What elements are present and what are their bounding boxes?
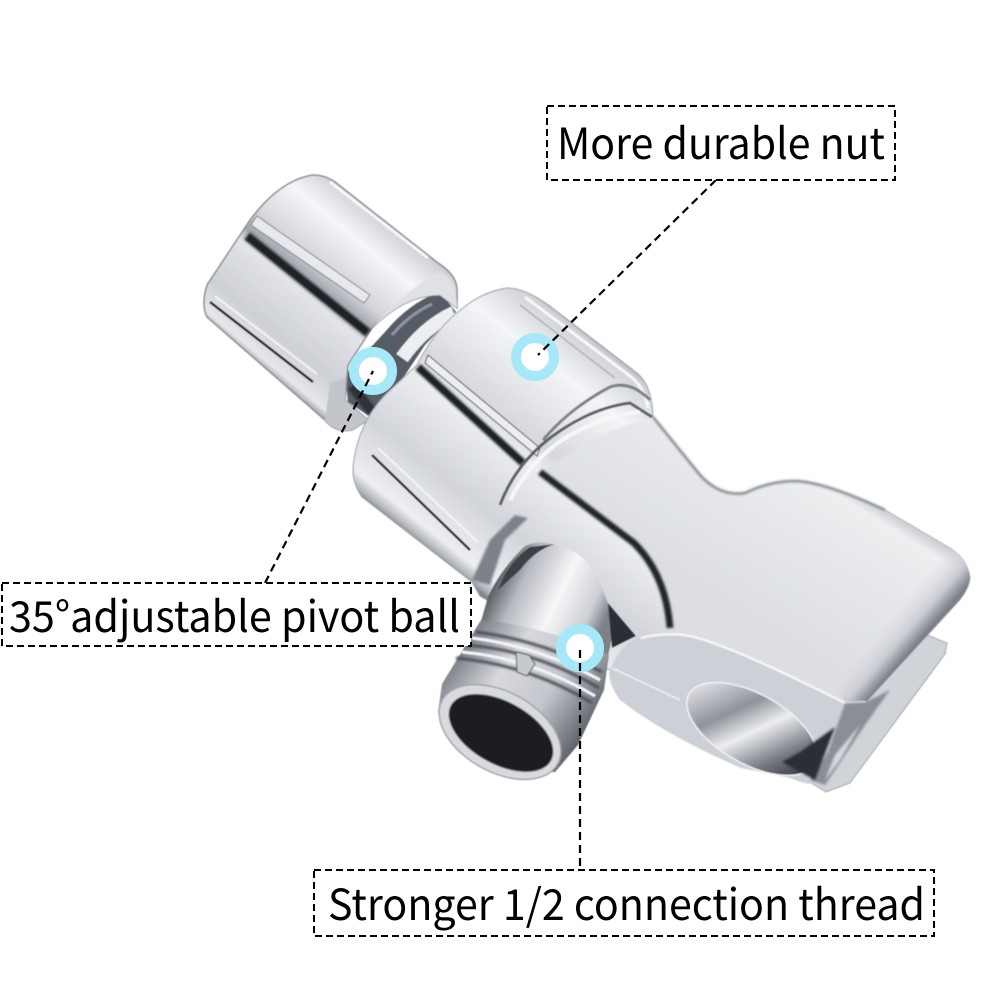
outlet opening: [436, 678, 566, 788]
label box: More durable nut: [557, 110, 885, 172]
main body: [353, 288, 970, 703]
threaded connector: [423, 620, 609, 799]
callout: connection thread: [314, 629, 934, 936]
threaded neck between nut and body: [345, 292, 456, 418]
nut lower groove: [210, 302, 313, 382]
outlet stub: [480, 542, 636, 655]
clamp jaw: [609, 634, 890, 795]
lower body groove: [372, 455, 470, 550]
leader line: [538, 180, 716, 355]
thread notch: [516, 652, 535, 676]
nut lower corner: [325, 378, 368, 431]
jaw corner shading: [810, 690, 890, 785]
product: chrome shower arm mount: [204, 175, 970, 799]
thread ridges: [456, 632, 602, 703]
body dark channel: [540, 472, 670, 628]
joint reflections: [472, 515, 528, 585]
marker ring: [561, 629, 599, 667]
label box: 35°adjustable pivot ball: [9, 583, 460, 645]
jaw hole: [672, 663, 832, 795]
left swivel nut: [204, 175, 457, 431]
outlet ring: [423, 665, 577, 799]
leader line: [579, 650, 581, 870]
nut dark band: [247, 236, 368, 333]
jaw seam: [612, 668, 680, 700]
marker ring: [516, 338, 554, 376]
leader line: [265, 371, 373, 583]
block top: [545, 417, 970, 703]
collar groove: [425, 355, 540, 456]
collar upper dark band: [418, 367, 523, 463]
callout: more durable nut: [516, 106, 895, 376]
label box: Stronger 1/2 connection thread: [328, 871, 925, 933]
clip back plate: [790, 635, 947, 792]
marker ring: [354, 352, 392, 390]
top edge shadow: [653, 417, 885, 510]
nut upper groove: [251, 216, 370, 303]
callout: pivot ball: [2, 352, 471, 646]
collar separation rings: [543, 385, 650, 440]
nut face bevel: [372, 272, 457, 328]
collar top edge highlight: [525, 297, 648, 408]
